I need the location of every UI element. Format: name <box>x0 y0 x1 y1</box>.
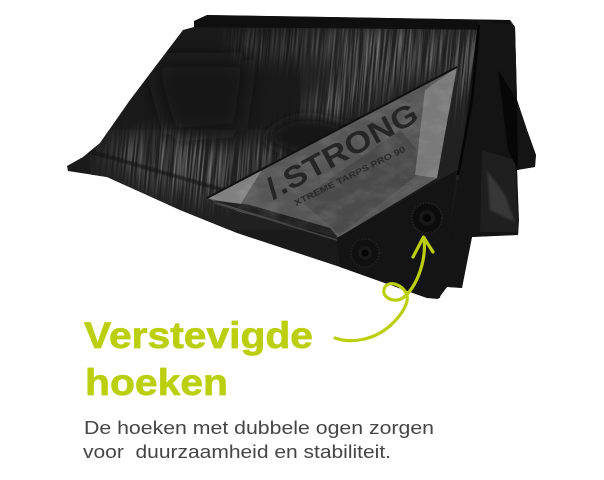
description text: De hoeken met dubbele ogen zorgen <box>84 418 434 438</box>
printed logo: /.STRONG <box>261 97 424 206</box>
heading: hoeken <box>85 362 228 403</box>
description text <box>83 418 434 462</box>
reinforcement strip and transparent window <box>200 60 460 240</box>
infographic canvas <box>67 15 536 458</box>
description text: voor duurzaamheid en stabiliteit. <box>83 442 391 462</box>
printed product name: XTREME TARPS PRO 90 <box>292 144 407 208</box>
curved arrow pointing at grommet <box>335 237 433 341</box>
black corner patch <box>337 170 457 298</box>
grommet upper <box>412 203 442 233</box>
grommet lower <box>351 239 379 267</box>
heading <box>84 315 313 403</box>
heading: Verstevigde <box>84 315 313 356</box>
tarp body silhouette <box>67 15 536 299</box>
tarp photo <box>67 15 536 299</box>
